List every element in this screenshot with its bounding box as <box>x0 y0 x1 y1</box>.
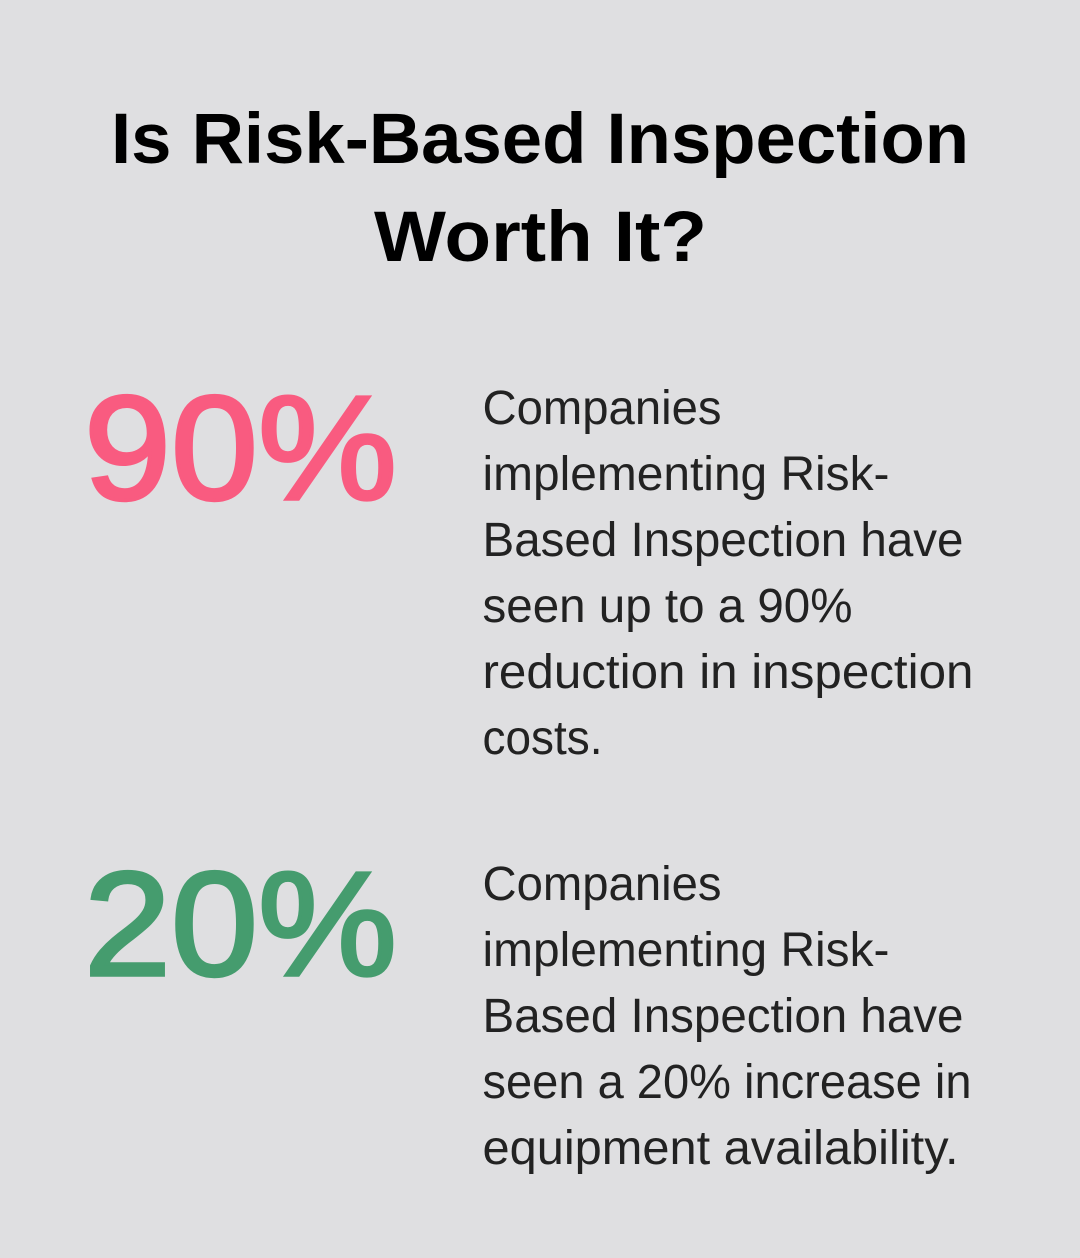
text block: 90% description: Based Inspection have <box>482 514 964 567</box>
title <box>111 100 969 277</box>
text block: 90% description: Companies <box>482 382 722 435</box>
title: Worth It? <box>374 198 707 277</box>
text block: 20% description <box>482 858 972 1175</box>
text block: 20% description: Based Inspection have <box>482 990 964 1043</box>
text block: 90% description <box>482 382 974 765</box>
text block: 20% description: Companies <box>482 858 722 911</box>
text block: 20% description: equipment availability. <box>482 1122 958 1175</box>
text block: 90% description: reduction in inspection <box>482 646 974 699</box>
stat: 90%: 90% <box>84 366 397 531</box>
text block: 20% description: implementing Risk- <box>482 924 890 977</box>
stat: 20%: 20% <box>84 842 397 1007</box>
text block: 90% description: seen up to a 90% <box>482 580 852 633</box>
text block: 90% description: costs. <box>482 712 602 765</box>
text block: 20% description: seen a 20% increase in <box>482 1056 972 1109</box>
title: Is Risk-Based Inspection <box>111 100 969 179</box>
text block: 90% description: implementing Risk- <box>482 448 890 501</box>
